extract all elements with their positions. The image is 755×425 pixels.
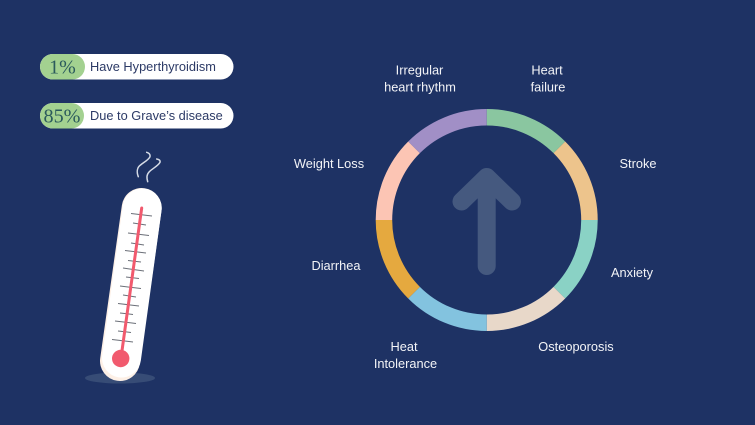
label: stroke: Stroke — [620, 156, 656, 171]
thermometer shadow — [85, 372, 155, 384]
icon: thermometer — [85, 208, 155, 384]
stat pill: 85% due to Grave's disease: 85% — [44, 106, 80, 128]
label: heart failure: failure — [531, 80, 565, 94]
thermometer mercury — [121, 208, 142, 358]
label: osteoporosis: Osteoporosis — [538, 339, 614, 354]
label: heat intolerance: Heat — [390, 339, 418, 354]
label: heat intolerance: Intolerance — [374, 356, 437, 371]
stat pill: 1% have hyperthyroidism: 1% — [49, 56, 76, 78]
label: anxiety: Anxiety — [611, 265, 654, 280]
label: irregular heart rhythm: Irregular — [396, 62, 443, 78]
label: heart failure: Heart — [531, 62, 563, 78]
stat pill: 1% have hyperthyroidism — [40, 54, 234, 80]
stat pill: 85% due to Grave's disease — [40, 103, 234, 128]
thermometer scale — [112, 214, 152, 342]
icon: steam — [137, 152, 160, 182]
icon: up arrow — [462, 177, 512, 266]
stat pill: 85% due to Grave's disease: Due to Grave’s disease — [90, 108, 223, 123]
label: diarrhea: Diarrhea — [311, 258, 361, 273]
thermometer body — [120, 208, 142, 361]
stat pill: 1% have hyperthyroidism: Have Hyperthyroidism — [90, 59, 216, 74]
ring chart of symptoms — [384, 117, 589, 323]
label: weight loss: Weight Loss — [294, 156, 364, 171]
label: irregular heart rhythm: heart rhythm — [384, 80, 456, 94]
